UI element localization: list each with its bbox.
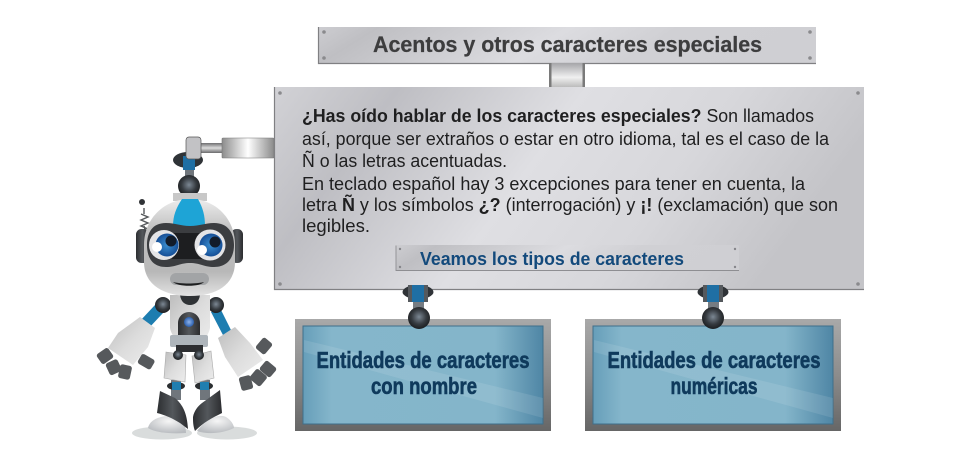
intro text: En teclado español hay 3 excepciones para tener en cuenta, la: [302, 174, 806, 194]
feet: [148, 390, 234, 433]
box: entidades numericas: [585, 319, 841, 431]
intro text: así, porque ser extraños o estar en otro idioma, tal es el caso de la: [302, 129, 830, 149]
robot: [96, 193, 277, 440]
goggles: [147, 223, 234, 267]
torso: [170, 295, 210, 360]
intro text: letra Ñ y los símbolos ¿? (interrogación) y ¡! (exclamación) que son: [302, 194, 838, 215]
box: entidades numericas: Entidades de caracteres: [608, 347, 820, 373]
antenna: [139, 199, 148, 232]
box: entidades numericas: numéricas: [670, 373, 758, 399]
head: [136, 193, 243, 296]
shadow: [132, 426, 257, 440]
main panel: [274, 87, 864, 290]
box: entidades con nombre: [295, 319, 551, 431]
intro text: [302, 106, 838, 236]
intro text: Ñ o las letras acentuadas.: [302, 150, 507, 171]
subheading plate: [396, 245, 739, 271]
fingers: [96, 337, 277, 391]
title plate: [318, 27, 816, 64]
joint left: [402, 285, 434, 329]
box: entidades con nombre: con nombre: [371, 373, 477, 399]
arms: [108, 297, 263, 377]
box: entidades con nombre: Entidades de caracteres: [316, 347, 530, 373]
title: Acentos y otros caracteres especiales: [373, 32, 762, 57]
intro text: legibles.: [302, 216, 370, 236]
joint right: [698, 285, 728, 329]
intro text: ¿Has oído hablar de los caracteres especiales? Son llamados: [302, 106, 814, 126]
connector between title and main panel: [549, 63, 585, 87]
mouth: [170, 273, 209, 286]
arm bracket from panel to robot: [173, 137, 274, 197]
subheading plate: Veamos los tipos de caracteres: [420, 249, 684, 269]
legs: [164, 351, 214, 400]
